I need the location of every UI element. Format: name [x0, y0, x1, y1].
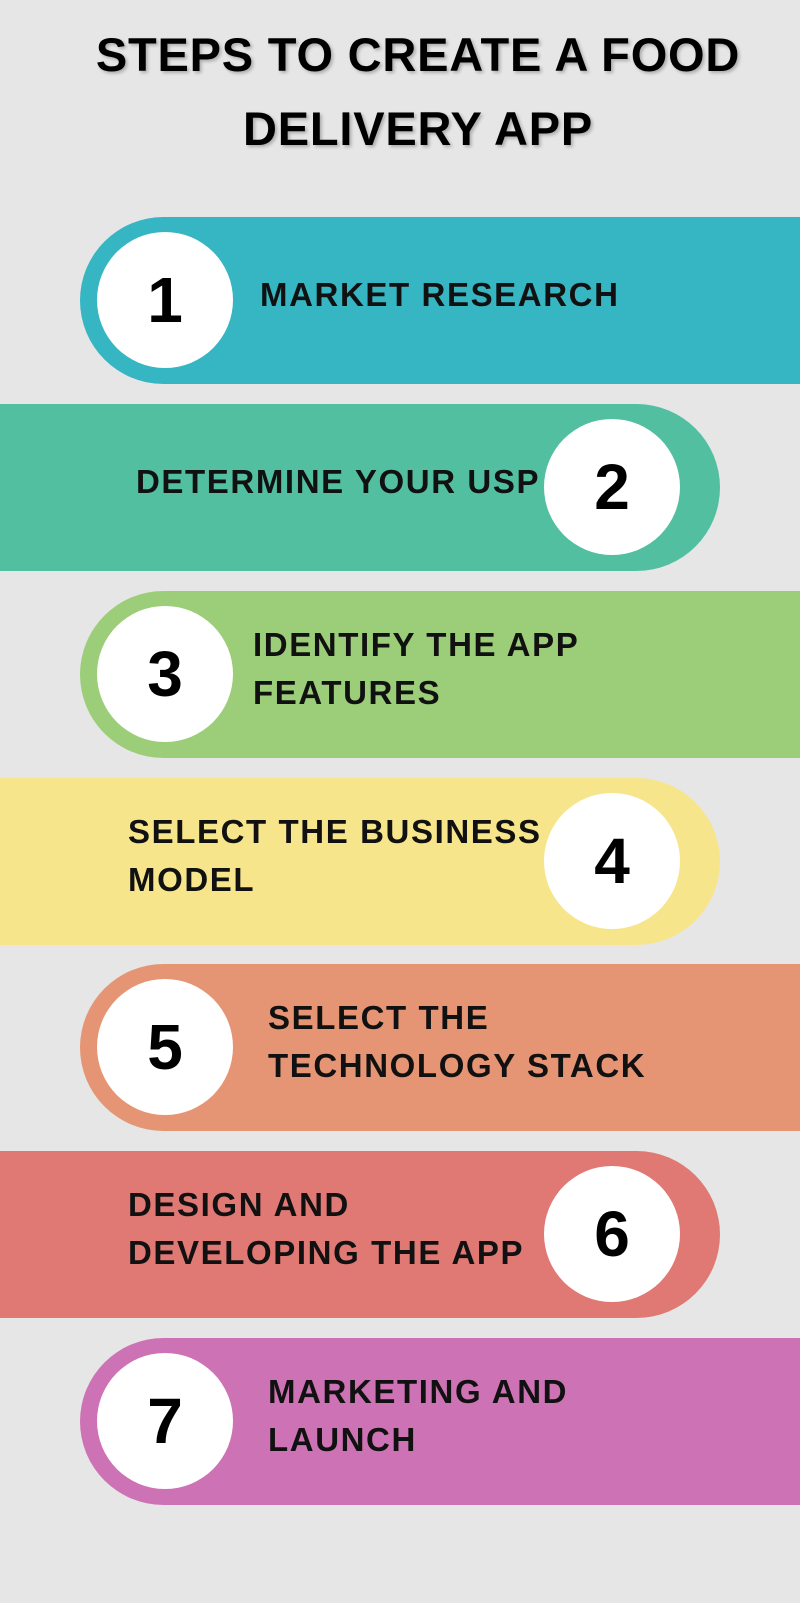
panel: step 3	[80, 591, 800, 758]
number 3	[97, 606, 233, 742]
label 3	[253, 626, 579, 710]
label 4: SELECT THE BUSINESS	[128, 812, 542, 850]
title: DELIVERY APP	[243, 102, 593, 155]
label 5	[268, 998, 646, 1084]
label 6	[128, 1186, 524, 1270]
panel: step 5	[80, 964, 800, 1131]
panel: step 2	[0, 404, 720, 571]
panel: step 7	[80, 1338, 800, 1505]
panel: step 1	[80, 217, 800, 384]
label 4: MODEL	[128, 860, 255, 898]
number 5	[97, 979, 233, 1115]
label 7: MARKETING AND	[268, 1372, 568, 1410]
title: STEPS TO CREATE A FOOD	[96, 28, 740, 81]
number 4: 4	[594, 825, 630, 897]
number 5: 5	[147, 1011, 183, 1083]
label 6: DEVELOPING THE APP	[128, 1234, 524, 1270]
number 2: 2	[594, 451, 630, 523]
panel: step 6	[0, 1151, 720, 1318]
panel: step 4	[0, 778, 720, 945]
label 3: FEATURES	[253, 674, 441, 710]
label 4	[128, 812, 542, 898]
label 2: DETERMINE YOUR USP	[136, 462, 540, 500]
number 1	[97, 232, 233, 368]
number 1: 1	[147, 264, 183, 336]
number 2	[544, 419, 680, 555]
label 7	[268, 1372, 568, 1458]
label 6: DESIGN AND	[128, 1186, 350, 1222]
label 5: SELECT THE	[268, 998, 489, 1036]
number 7	[97, 1353, 233, 1489]
label 3: IDENTIFY THE APP	[253, 626, 579, 662]
number 4	[544, 793, 680, 929]
label 1: MARKET RESEARCH	[260, 276, 620, 312]
number 6	[544, 1166, 680, 1302]
number 7: 7	[147, 1385, 183, 1457]
number 6: 6	[594, 1198, 630, 1270]
title	[96, 28, 741, 155]
label 5: TECHNOLOGY STACK	[268, 1046, 646, 1084]
label 7: LAUNCH	[268, 1420, 417, 1458]
number 3: 3	[147, 638, 183, 710]
